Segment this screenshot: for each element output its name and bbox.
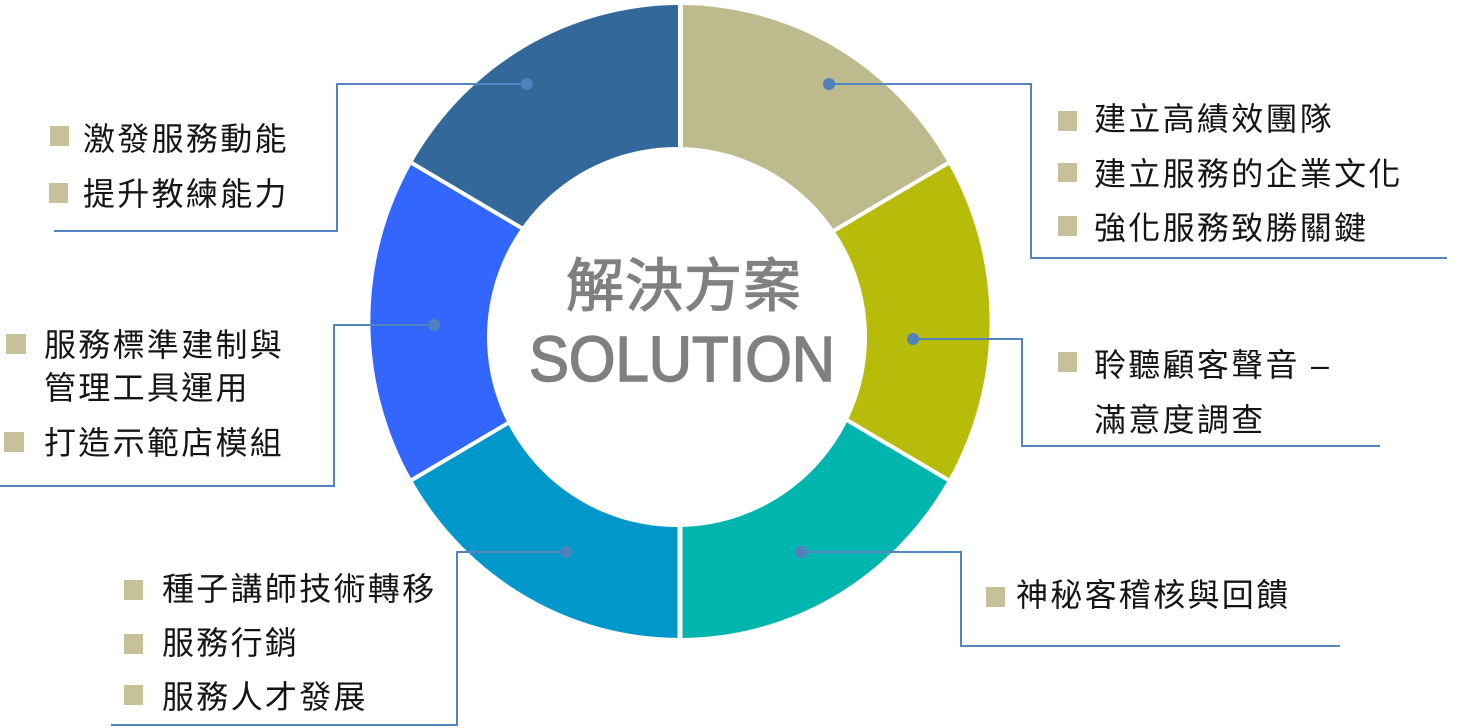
callout: bottom right — [795, 546, 1340, 646]
bullet 2 — [49, 183, 68, 203]
dot — [823, 78, 835, 90]
text 1: 激發服務動能 — [83, 121, 289, 157]
dot — [907, 333, 919, 345]
leader line — [801, 552, 1340, 646]
dot — [560, 546, 572, 558]
bullet 2 — [124, 634, 143, 654]
bullet 2 — [4, 432, 24, 452]
bullet 3 — [124, 685, 143, 705]
callout: top right — [823, 78, 1447, 258]
leader line — [54, 84, 527, 231]
donut chart — [370, 0, 990, 642]
text: 神秘客稽核與回饋 — [1016, 577, 1290, 613]
callout: left — [0, 319, 440, 486]
segment: bottom right — [680, 322, 948, 638]
dot — [428, 319, 440, 331]
segment: right — [680, 163, 990, 480]
text 2: 提升教練能力 — [83, 176, 289, 212]
bullet 3 — [1058, 216, 1077, 236]
dot — [795, 546, 807, 558]
bullet 1 — [50, 126, 69, 146]
text line 2: 滿意度調查 — [1094, 402, 1266, 438]
text: 聆聽顧客聲音 – — [1094, 347, 1331, 383]
bullet 1 — [6, 334, 26, 354]
leader line — [829, 84, 1447, 258]
bullet 2 — [1058, 163, 1077, 182]
bullet 1 — [124, 580, 143, 600]
text 2: 建立服務的企業文化 — [1094, 156, 1403, 192]
segment: bottom left — [412, 322, 680, 638]
segment: top left — [412, 5, 680, 321]
title: English: SOLUTION — [529, 323, 835, 395]
text 1: 服務標準建制與 — [44, 327, 284, 363]
bullet — [986, 587, 1005, 607]
segment: top right — [680, 5, 948, 322]
bullet 1 — [1058, 111, 1077, 131]
callout: top left — [49, 78, 533, 231]
center hole — [487, 147, 867, 527]
text 1: 種子講師技術轉移 — [162, 571, 436, 607]
text 3: 服務人才發展 — [162, 679, 368, 715]
dot — [521, 78, 533, 90]
segment: left — [370, 163, 680, 480]
text 3: 強化服務致勝關鍵 — [1094, 210, 1368, 246]
bullet — [1058, 352, 1077, 372]
text 2: 服務行銷 — [162, 625, 299, 661]
text 1: 建立高績效團隊 — [1094, 101, 1334, 137]
title: Chinese: 解決方案 — [566, 254, 802, 319]
callout: right — [907, 333, 1380, 446]
center title — [529, 254, 835, 395]
leader line — [0, 325, 434, 486]
leader line — [913, 339, 1380, 446]
callout: bottom left — [111, 546, 572, 725]
text 1 line 2: 管理工具運用 — [44, 370, 250, 406]
text 2: 打造示範店模組 — [44, 425, 284, 461]
leader line — [111, 552, 566, 725]
